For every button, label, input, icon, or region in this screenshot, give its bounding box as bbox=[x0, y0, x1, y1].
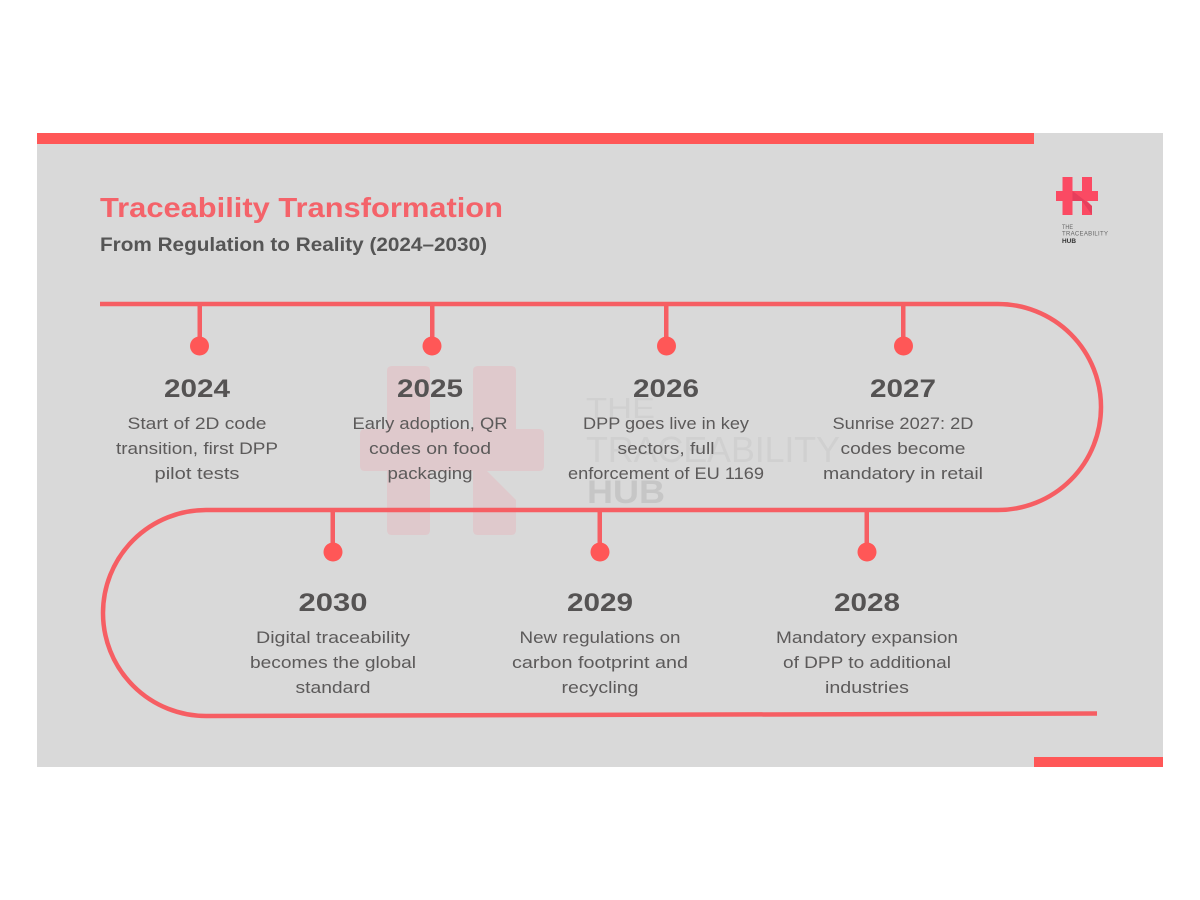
watermark logo bbox=[360, 366, 840, 535]
milestone 2028: 2028 bbox=[834, 589, 900, 617]
milestone 2025 bbox=[352, 304, 508, 483]
milestone 2028: of DPP to additional bbox=[783, 653, 951, 672]
milestone 2027: mandatory in retail bbox=[823, 464, 983, 483]
milestone 2026 bbox=[568, 304, 764, 483]
milestone 2027: codes become bbox=[840, 439, 966, 458]
milestone 2029: 2029 bbox=[567, 589, 633, 617]
milestone 2024 bbox=[116, 304, 278, 483]
milestone 2026: DPP goes live in key bbox=[583, 414, 750, 433]
title: Traceability Transformation bbox=[100, 192, 503, 223]
milestone 2024: 2024 bbox=[164, 375, 230, 403]
milestone 2026: enforcement of EU 1169 bbox=[568, 464, 764, 483]
milestone 2028: industries bbox=[825, 678, 909, 697]
milestone 2026: sectors, full bbox=[618, 439, 714, 458]
milestone 2029: recycling bbox=[562, 678, 638, 697]
milestone 2024: Start of 2D code bbox=[128, 414, 266, 433]
milestone 2024: transition, first DPP bbox=[116, 439, 278, 458]
milestone 2025: codes on food bbox=[369, 439, 491, 458]
milestone 2027 bbox=[823, 304, 983, 483]
logo: THE bbox=[1062, 225, 1073, 231]
milestone 2025: 2025 bbox=[397, 375, 463, 403]
milestone 2029: New regulations on bbox=[520, 628, 680, 647]
milestone 2030: standard bbox=[296, 678, 370, 697]
milestone 2030: becomes the global bbox=[250, 653, 416, 672]
milestone 2026: 2026 bbox=[633, 375, 699, 403]
timeline path bbox=[100, 304, 1101, 716]
milestone 2030: 2030 bbox=[298, 589, 368, 617]
milestone 2030: Digital traceability bbox=[256, 628, 411, 647]
logo: TRACEABILITY bbox=[1062, 232, 1108, 238]
milestone 2030 bbox=[250, 510, 416, 697]
subtitle: From Regulation to Reality (2024–2030) bbox=[100, 235, 487, 256]
milestone 2025: Early adoption, QR bbox=[352, 414, 508, 433]
panel: background bbox=[37, 133, 1163, 767]
watermark logo: THE bbox=[586, 393, 655, 425]
milestone 2025: packaging bbox=[388, 464, 472, 483]
milestone 2027: Sunrise 2027: 2D bbox=[832, 414, 974, 433]
milestone 2029 bbox=[512, 510, 688, 697]
milestone 2029: carbon footprint and bbox=[512, 653, 688, 672]
milestone 2028: Mandatory expansion bbox=[776, 628, 958, 647]
logo: HUB bbox=[1062, 239, 1077, 245]
logo bbox=[1056, 177, 1108, 245]
milestone 2024: pilot tests bbox=[154, 464, 240, 483]
watermark logo: HUB bbox=[587, 474, 665, 510]
milestone 2028 bbox=[776, 510, 958, 697]
bottom accent bar bbox=[1034, 757, 1163, 767]
top accent bar bbox=[37, 133, 1034, 144]
milestone 2027: 2027 bbox=[870, 375, 936, 403]
watermark logo: TRACEABILITY bbox=[586, 429, 840, 470]
